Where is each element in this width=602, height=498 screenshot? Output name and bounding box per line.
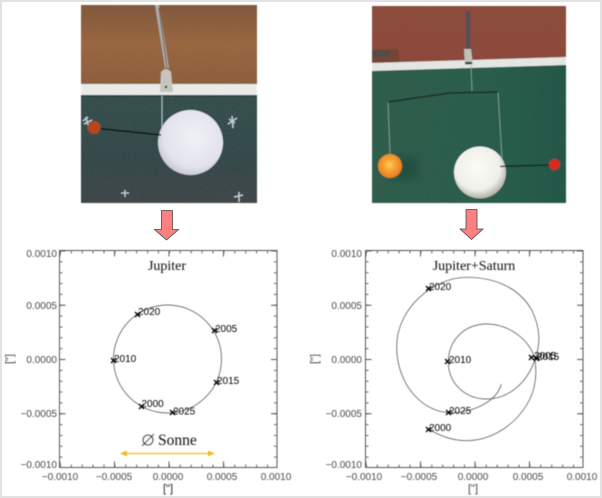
year markers and labels <box>111 307 240 418</box>
y axis tick labels <box>326 249 362 471</box>
x axis tick labels: 0.0005 <box>513 472 544 483</box>
photo: Jupiter and Saturn mobile model <box>372 6 566 203</box>
year markers and labels: 2000 <box>142 399 164 410</box>
y axis tick labels: 0.0010 <box>331 249 362 260</box>
x axis tick labels: 0.0000 <box>458 472 489 483</box>
year markers and labels: 2015 <box>217 376 240 387</box>
arrow: left photo to Jupiter plot <box>154 210 178 240</box>
chart: Jupiter barycentre path <box>4 249 292 495</box>
arrow: solar diameter <box>120 450 215 456</box>
x axis tick labels <box>346 472 598 483</box>
year markers and labels: 2015 <box>537 352 560 363</box>
axis titles: ["] <box>468 483 478 495</box>
label: solar diameter: Sonne <box>158 432 197 449</box>
year markers and labels: 2025 <box>173 406 196 418</box>
spiral path <box>397 277 539 441</box>
y axis tick labels: 0.0010 <box>26 249 57 260</box>
y axis tick labels: −0.0005 <box>21 409 57 420</box>
x axis tick labels: 0.0010 <box>261 472 292 483</box>
heading: Jupiter+Saturn: Jupiter+Saturn <box>433 259 515 274</box>
year markers and labels: 2020 <box>429 282 452 293</box>
x axis tick labels: −0.0005 <box>401 472 438 483</box>
year markers and labels: 2005 <box>215 324 238 335</box>
year markers and labels: 2025 <box>449 406 472 417</box>
year markers and labels: 2020 <box>138 307 161 318</box>
axis titles: ["] <box>163 483 173 495</box>
x axis tick labels: 0.0005 <box>207 472 238 483</box>
x axis tick labels: −0.0005 <box>96 472 133 483</box>
year markers and labels: 2010 <box>114 354 137 365</box>
x axis tick labels: 0.0010 <box>567 472 598 483</box>
y axis tick labels <box>21 249 57 471</box>
x axis tick labels <box>42 472 292 483</box>
chart: Jupiter+Saturn barycentre path <box>309 249 598 495</box>
year markers and labels: 2000 <box>429 423 452 434</box>
photo: Jupiter mobile model <box>81 5 257 203</box>
year markers and labels <box>426 282 560 434</box>
x axis tick labels: 0.0000 <box>153 472 184 483</box>
y axis title: ["] <box>4 354 16 364</box>
y axis title: ["] <box>309 354 321 364</box>
y axis tick labels: −0.0010 <box>326 460 362 471</box>
x axis tick labels: −0.0010 <box>346 472 383 483</box>
x axis tick labels: −0.0010 <box>42 472 79 483</box>
orbit circle <box>114 305 222 413</box>
y axis tick labels: 0.0005 <box>26 301 57 312</box>
heading: Jupiter: Jupiter <box>148 259 186 274</box>
year markers and labels: 2005 <box>534 351 557 362</box>
y axis tick labels: 0.0000 <box>331 355 362 366</box>
year markers and labels: 2010 <box>449 355 472 366</box>
y axis tick labels: 0.0000 <box>26 355 57 366</box>
y axis tick labels: 0.0005 <box>331 301 362 312</box>
y axis tick labels: −0.0010 <box>21 460 57 471</box>
y axis tick labels: −0.0005 <box>326 409 362 420</box>
arrow: right photo to Jupiter+Saturn plot <box>460 210 483 240</box>
